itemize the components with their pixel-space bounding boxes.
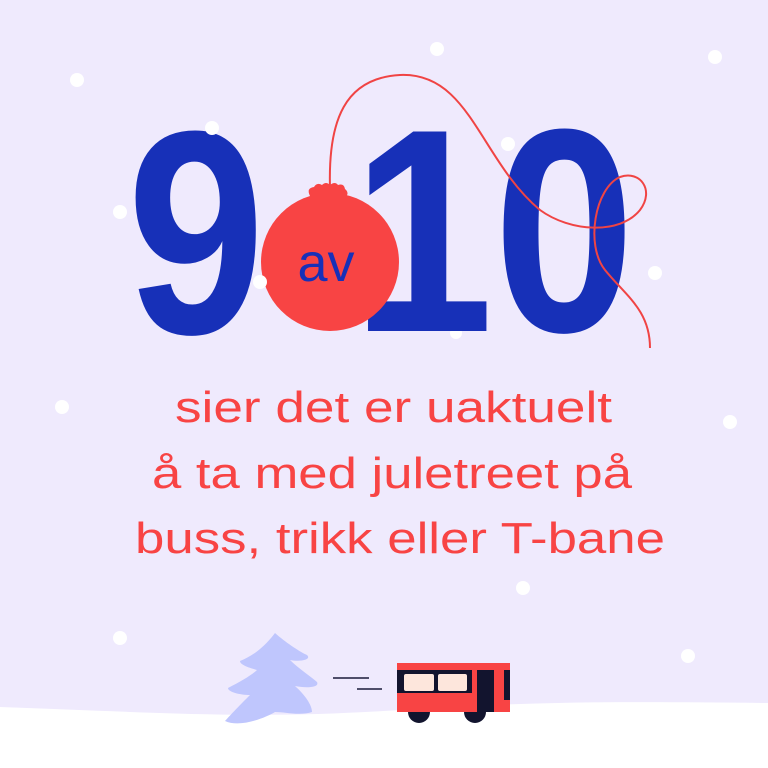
ornament ball (261, 183, 399, 331)
subtitle text (135, 383, 665, 563)
subtitle text: å ta med juletreet på (152, 449, 633, 498)
snowflakes (55, 42, 737, 663)
digits 10: 10 (352, 69, 635, 393)
label av: av (297, 233, 355, 293)
big number 9 av 10 (127, 69, 650, 395)
speed lines (333, 678, 382, 689)
icon: bus (397, 663, 510, 723)
subtitle text: buss, trikk eller T-bane (135, 514, 665, 563)
string (330, 75, 650, 348)
subtitle text: sier det er uaktuelt (175, 383, 612, 432)
snowy ground (0, 702, 768, 768)
icon: tree (225, 633, 317, 723)
digit 9: 9 (127, 71, 265, 395)
